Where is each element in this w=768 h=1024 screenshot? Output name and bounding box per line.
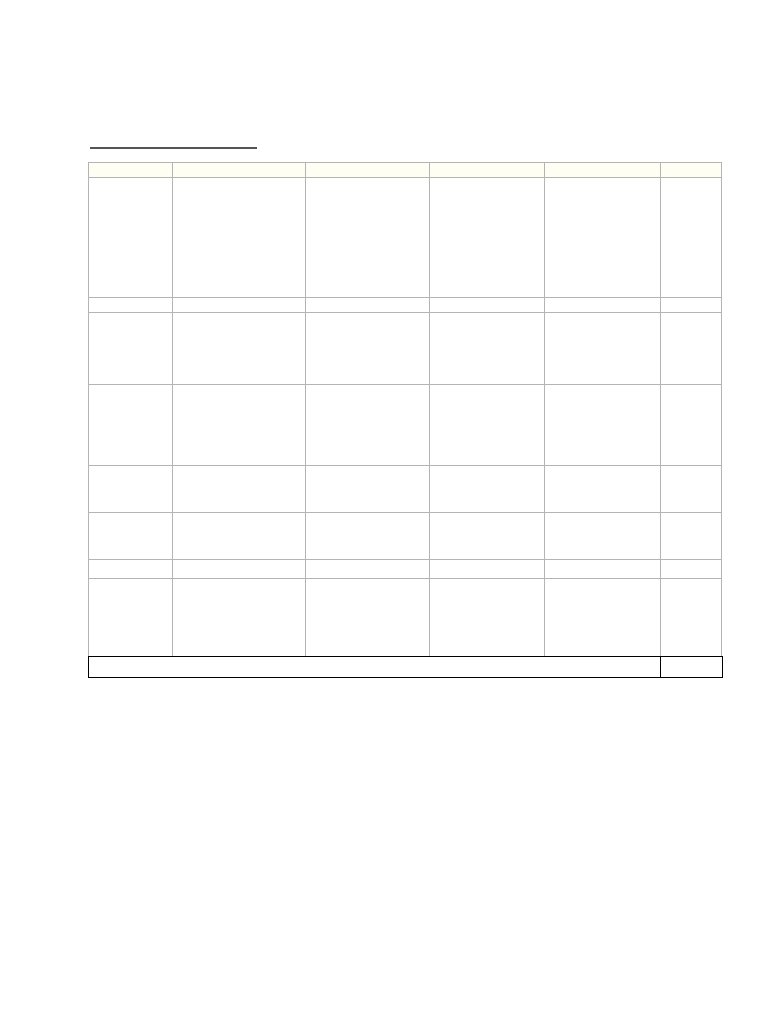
table xyxy=(88,162,723,678)
header row xyxy=(88,162,722,177)
total row xyxy=(88,656,661,678)
title underline xyxy=(90,147,257,149)
